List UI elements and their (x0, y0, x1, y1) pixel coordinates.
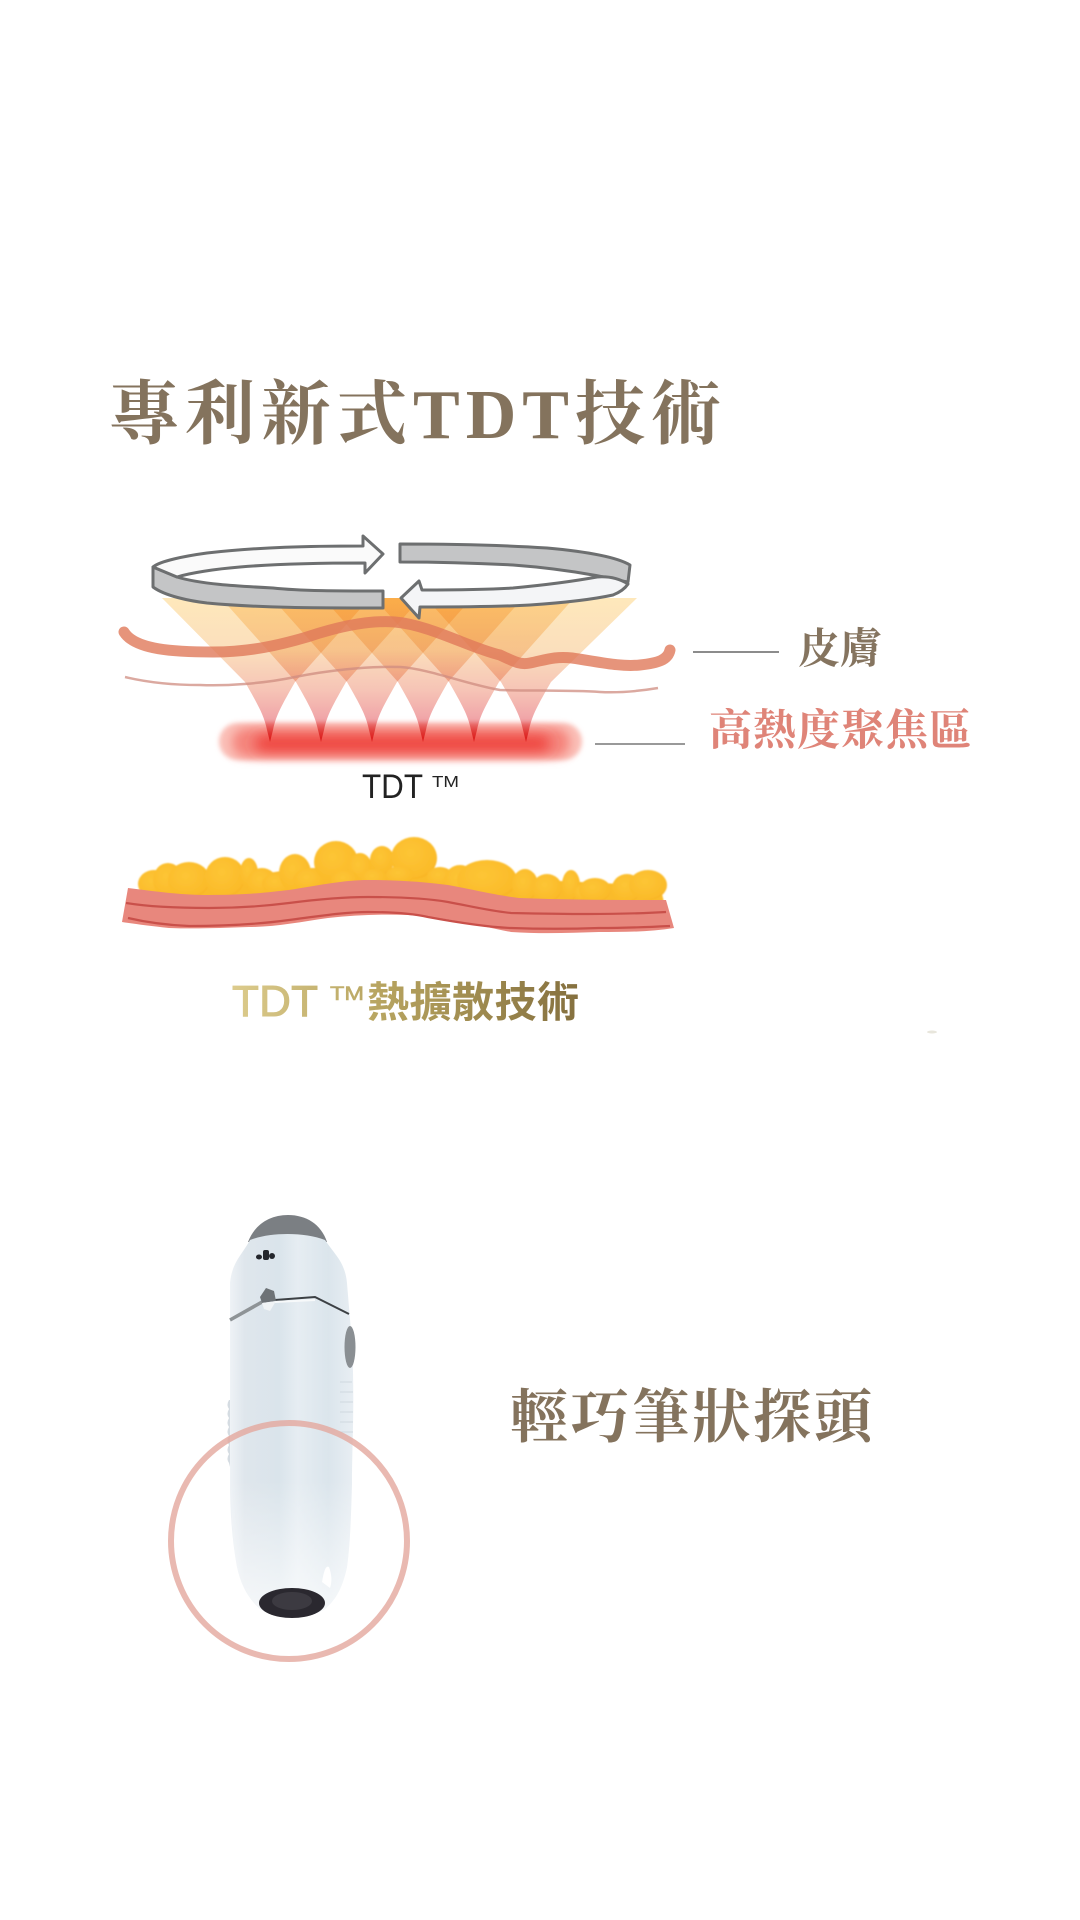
handheld pen-shaped probe (228, 1215, 356, 1618)
probe body (230, 1234, 353, 1616)
title: 專利新式TDT技術 (109, 377, 721, 454)
TDT thermal diffusion caption: 熱擴散技術 (367, 979, 579, 1026)
probe side ribs (228, 1400, 232, 1475)
probe lower highlight (231, 1483, 352, 1616)
rotating ring: lower-left gray band (153, 567, 383, 608)
probe logo (256, 1250, 275, 1260)
highlight circle (171, 1423, 407, 1659)
TDT thermal diffusion caption: TDT (232, 977, 318, 1026)
skin label: 皮膚 (798, 626, 882, 673)
probe right ribs (340, 1382, 353, 1432)
TDT thermal diffusion caption (232, 977, 579, 1026)
rotating ring: upper-right gray band (400, 544, 630, 582)
probe notch (260, 1288, 276, 1303)
probe tip (259, 1588, 325, 1618)
skin leader line (693, 651, 779, 653)
focus zone label: 高熱度聚焦區 (709, 707, 972, 755)
probe top cap (248, 1215, 327, 1242)
skin upper layer curve (124, 622, 670, 665)
faint speck (927, 1030, 937, 1034)
probe tip inner (272, 1592, 312, 1610)
muscle band (122, 880, 674, 933)
trademark symbol: TM (432, 774, 459, 791)
TDT heat-focus diagram (124, 536, 670, 806)
probe tip highlight (322, 1567, 331, 1588)
probe side button (344, 1326, 356, 1368)
TDT trademark label: TDT (362, 768, 423, 806)
fat and muscle diagram (122, 837, 674, 933)
probe seam (230, 1302, 262, 1320)
focus zone leader line (595, 743, 685, 745)
rotating ring: upper-left white arrow (153, 536, 383, 577)
skin lower layer curve (125, 667, 658, 692)
rotating ring: lower-right white arrow (401, 577, 628, 618)
heat focus zone (219, 723, 582, 760)
focused ultrasound beams (162, 598, 637, 742)
TDT thermal diffusion caption: TM (330, 984, 364, 1005)
muscle fibre lines (126, 897, 670, 929)
probe heading: 輕巧筆狀探頭 (510, 1385, 875, 1450)
fat cells (138, 837, 667, 902)
